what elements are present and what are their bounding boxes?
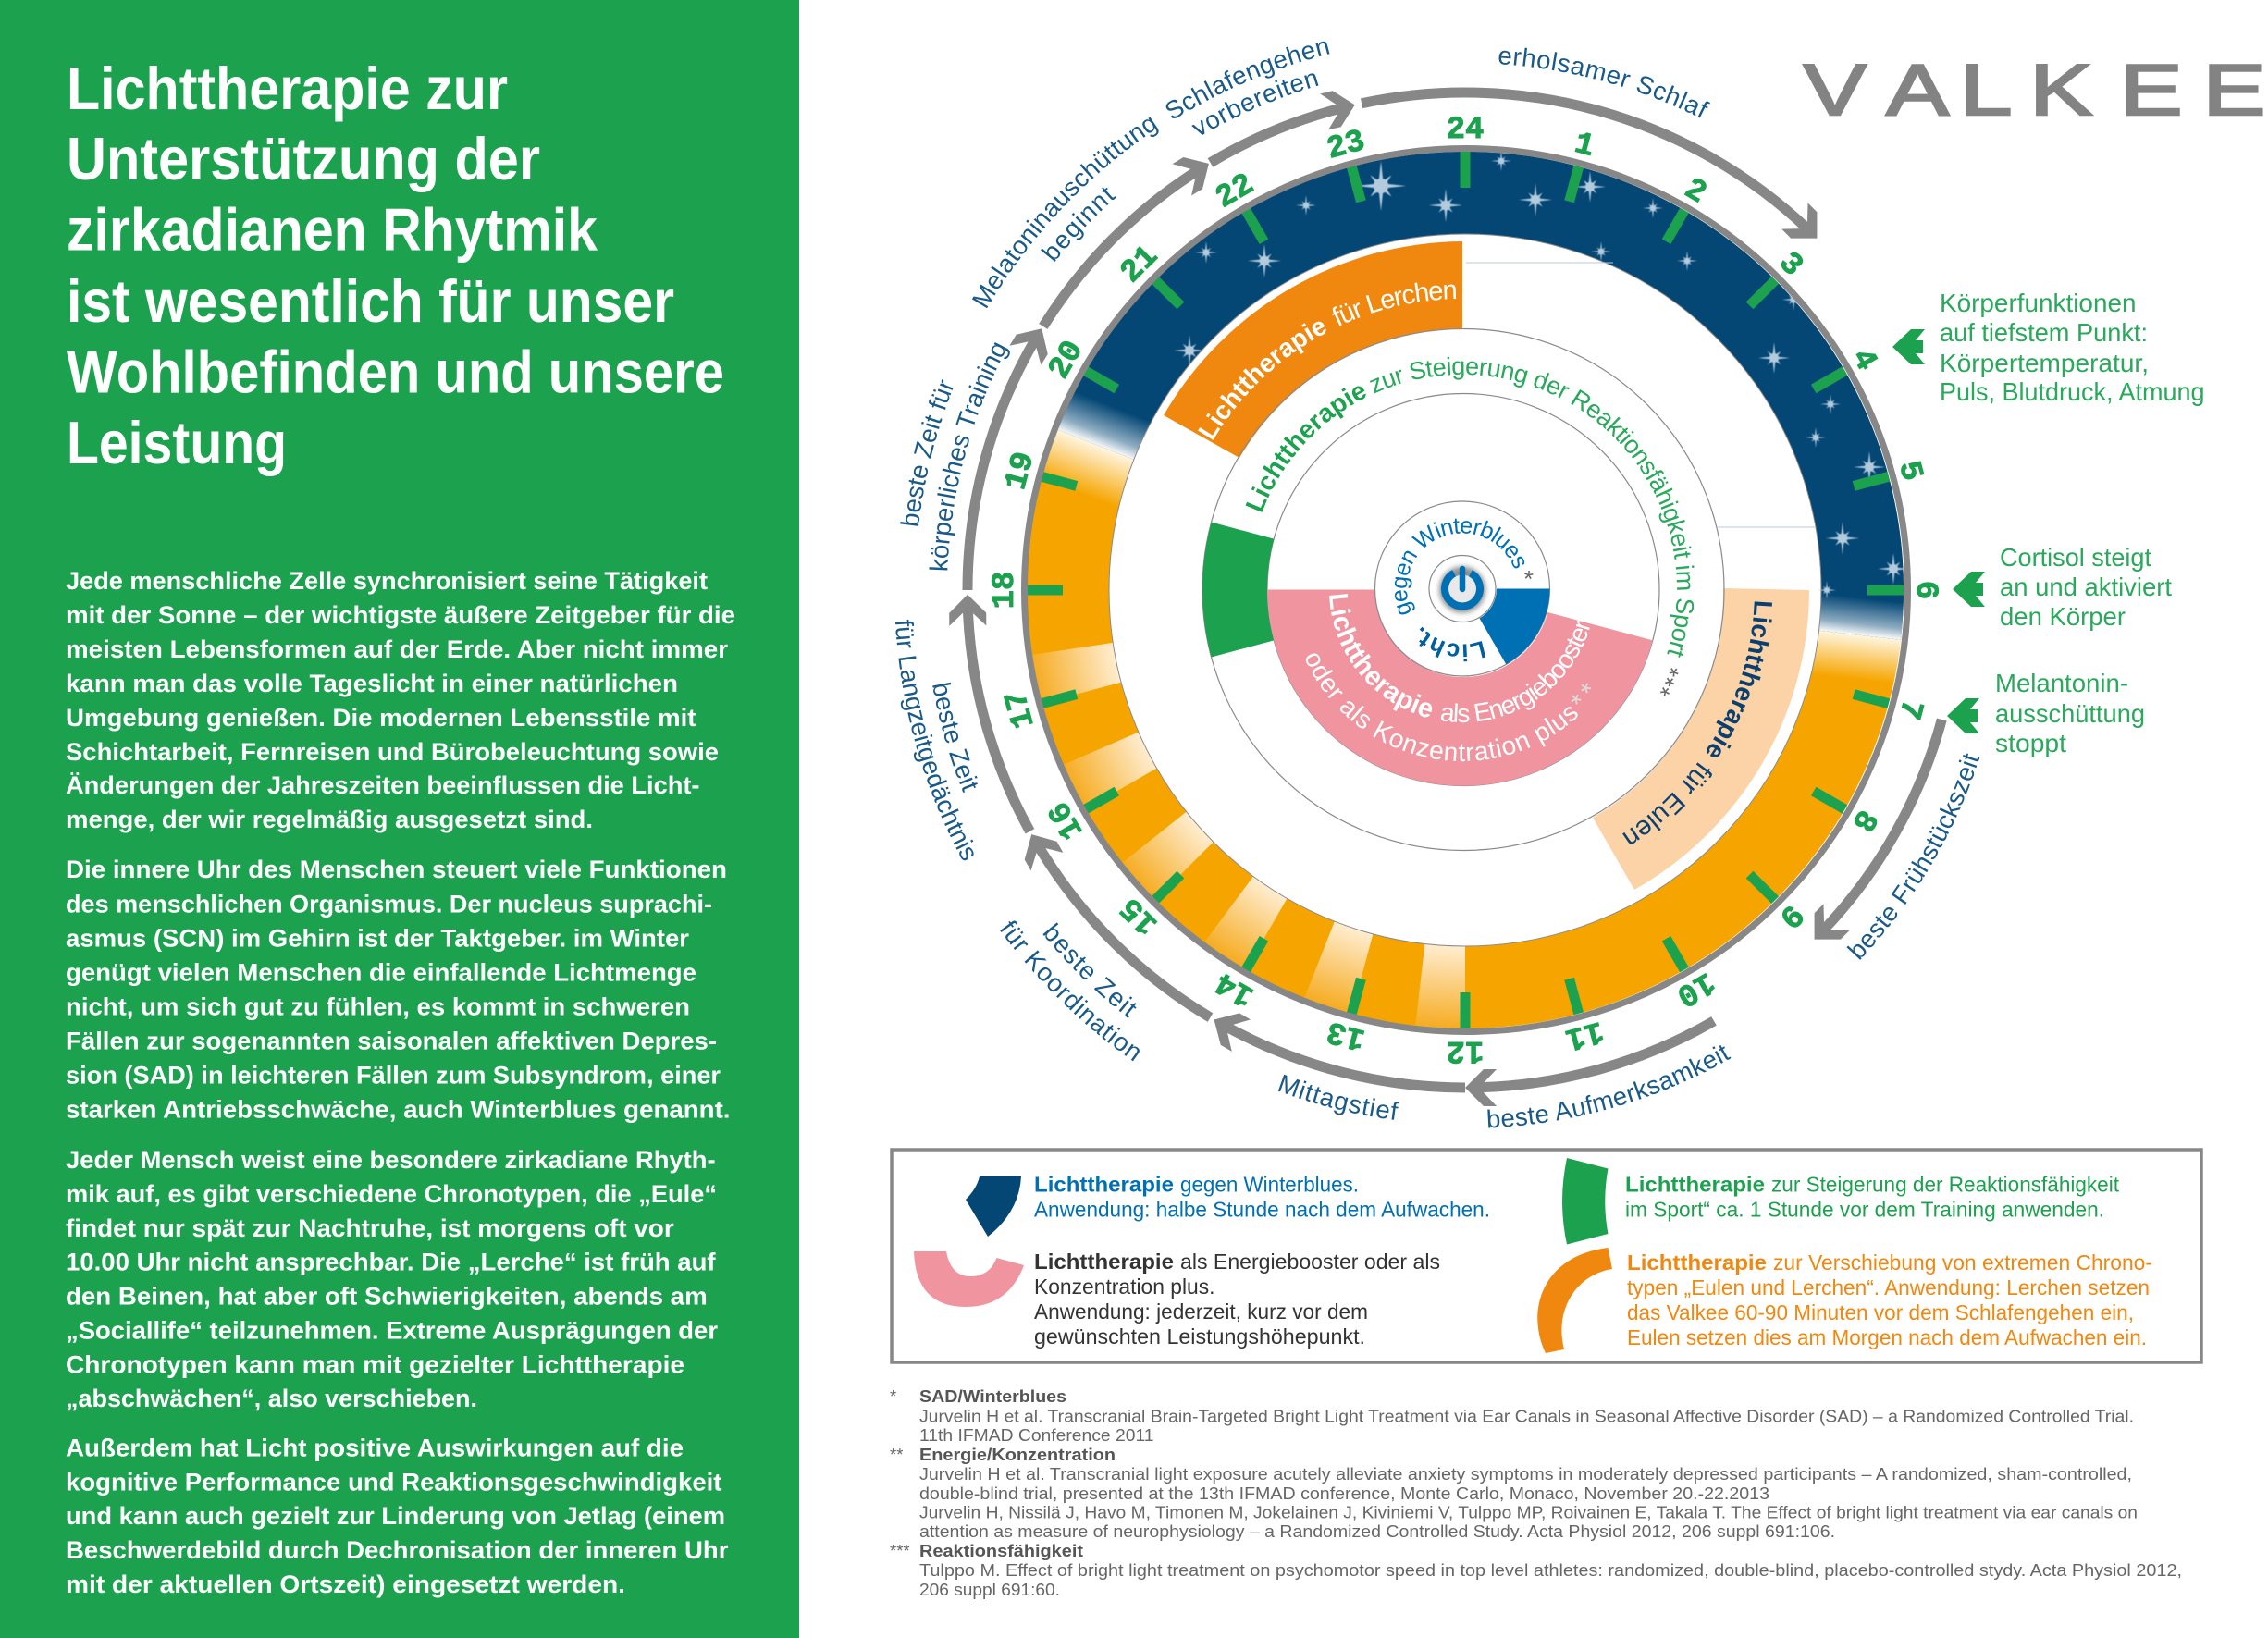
text block: paragraph 2: Fällen zur sogenannten saisonalen affektiven Depres- — [66, 1027, 717, 1054]
navy night band — [1057, 152, 1904, 640]
arrow: Mittagstief — [1204, 1004, 1465, 1088]
curved text: Lichttherapie zur Steigerung der Reaktionsfähigkeit im Sport: Lichttherapie — [1245, 387, 1366, 512]
curved text: Licht gegen Winterblues: gegen Winterblues — [1395, 518, 1524, 614]
text block: paragraph 1: Änderungen der Jahreszeiten beeinflussen die Licht- — [66, 771, 699, 799]
curved text: Licht gegen Winterblues — [1395, 518, 1534, 662]
hour numbers: 14 — [1210, 964, 1261, 1013]
title: ist wesentlich für unser — [67, 267, 674, 335]
footnotes: * — [890, 1386, 896, 1406]
wedge: pink Energiebooster — [1267, 590, 1653, 786]
curved text: Lichttherapie als Energiebooster oder als Konzentration plus: als Energiebooster — [1441, 620, 1590, 723]
curved text: Lichttherapie als Energiebooster oder als Konzentration plus — [1306, 594, 1591, 762]
text block: paragraph 1 — [66, 567, 735, 833]
hour numbers: 22 — [1210, 167, 1261, 216]
label: beste Zeit für Langzeitgedächtnis: für Langzeitgedächtnis — [895, 620, 1021, 860]
text block: paragraph 2: asmus (SCN) im Gehirn ist der Taktgeber. im Winter — [66, 925, 689, 953]
legend text: Chronotypen: zur Verschiebung von extremen Chrono- — [1773, 1250, 2152, 1275]
text block: paragraph 3: mik auf, es gibt verschiedene Chronotypen, die „Eule“ — [66, 1180, 717, 1208]
legend text: Chronotypen: das Valkee 60-90 Minuten vor dem Schlafengehen ein, — [1627, 1300, 2134, 1324]
curved text: Lichttherapie für Eulen: Lichttherapie — [1707, 601, 1772, 757]
callout: Cortisol: den Körper — [2000, 602, 2126, 631]
curved text: Lichttherapie zur Steigerung der Reaktionsfähigkeit im Sport: *** — [1660, 668, 1678, 696]
icon: green wedge — [1562, 1158, 1608, 1245]
callout: Körperfunktionen: Puls, Blutdruck, Atmung — [1940, 377, 2205, 406]
legend text: Winterblues: Anwendung: halbe Stunde nach dem Aufwachen. — [1034, 1197, 1490, 1221]
icon: orange wedge — [1537, 1248, 1612, 1353]
label: beste Aufmerksamkeit: beste Aufmerksamkeit — [1487, 1045, 1732, 1128]
panel: legend — [892, 1150, 2201, 1362]
hour numbers: 13 — [1324, 1012, 1369, 1056]
ring outlines — [1202, 329, 1724, 851]
curved text: Lichttherapie zur Steigerung der Reaktionsfähigkeit im Sport — [1245, 357, 1695, 696]
callout: Melantonin: Melantonin- — [1995, 669, 2128, 697]
hour numbers: 15 — [1115, 890, 1165, 941]
label: beste Frühstückszeit: beste Frühstückszeit — [1846, 753, 1979, 960]
legend text: Chronotypen: typen „Eulen und Lerchen“. Anwendung: Lerchen setzen — [1627, 1275, 2150, 1299]
callout: Cortisol — [2000, 543, 2172, 631]
curved text: Lichttherapie für Eulen — [1622, 601, 1772, 844]
text block: paragraph 3: 10.00 Uhr nicht ansprechbar. Die „Lerche“ ist früh auf — [66, 1249, 716, 1276]
text block: paragraph 2: sion (SAD) in leichteren Fällen zum Subsyndrom, einer — [66, 1062, 721, 1090]
wedge: Lichttherapie für Eulen — [1593, 588, 1809, 890]
panel: green text column — [0, 0, 799, 1638]
callout: Cortisol: Cortisol steigt — [2000, 543, 2151, 572]
hour numbers: 3 — [1771, 246, 1809, 284]
callout: Körperfunktionen — [1940, 289, 2205, 406]
hour numbers: 24 — [1447, 113, 1484, 148]
text block: paragraph 2 — [66, 856, 731, 1123]
icon: green arrow 4h — [1892, 329, 1925, 364]
legend text: Winterblues: Lichttherapie — [1034, 1173, 1174, 1197]
callout: Körperfunktionen: Körperfunktionen — [1940, 289, 2137, 317]
text block: paragraph 1: Schichtarbeit, Fernreisen und Bürobeleuchtung sowie — [66, 738, 719, 766]
text block: paragraph 2: des menschlichen Organismus. Der nucleus suprachi- — [66, 890, 712, 918]
footnotes: Energie/Konzentration — [919, 1445, 1116, 1464]
text block: paragraph 4: und kann auch gezielt zur Linderung von Jetlag (einem — [66, 1502, 725, 1530]
wedge: blue Winterblues — [1480, 588, 1550, 664]
text block: paragraph 4: mit der aktuellen Ortszeit) eingesetzt werden. — [66, 1570, 625, 1598]
clock: day/night ring — [988, 113, 1942, 1067]
label: Schlafengehen vorbereiten: vorbereiten — [1191, 73, 1319, 135]
legend text: Winterblues — [1034, 1173, 1490, 1221]
text block: paragraph 3: den Beinen, hat aber oft Schwierigkeiten, abends am — [66, 1282, 708, 1310]
footnotes: SAD/Winterblues — [919, 1386, 1066, 1406]
footnotes: 11th IFMAD Conference 2011 — [919, 1425, 1154, 1445]
hour numbers: 5 — [1890, 458, 1929, 485]
hour numbers: 16 — [1042, 794, 1091, 845]
callout: Melantonin: stoppt — [1995, 729, 2066, 757]
hour numbers: 20 — [1042, 335, 1091, 386]
footnotes: Jurvelin H et al. Transcranial Brain-Targeted Bright Light Treatment via Ear Canals in Seasonal Affective Disorder (SAD) – a Randomized Controlled Trial. — [919, 1406, 2134, 1426]
hour numbers: 4 — [1843, 343, 1883, 377]
arrow: erholsamer Schlaf — [1362, 92, 1830, 252]
wedge: Lichttherapie für Lerchen — [1164, 241, 1462, 458]
text block: paragraph 1: Jede menschliche Zelle synchronisiert seine Tätigkeit — [66, 567, 708, 595]
text block: paragraph 1: kann man das volle Tageslicht in einer natürlichen — [66, 670, 678, 697]
footnotes: ** — [890, 1445, 903, 1464]
label: Schlafengehen vorbereiten: Schlafengehen — [1165, 41, 1330, 144]
curved text: Lichttherapie für Lerchen: für Lerchen — [1332, 283, 1456, 326]
footnotes — [890, 1386, 2182, 1599]
callout: Cortisol: an und aktiviert — [2000, 573, 2172, 601]
label: beste Zeit für körperliches Training: beste Zeit für — [900, 379, 953, 526]
legend text: Reaktionsfähigkeit: im Sport“ ca. 1 Stunde vor dem Training anwenden. — [1625, 1197, 2104, 1221]
label: Melatoninauschüttung beginnt: Melatoninauschüttung — [972, 117, 1159, 309]
footnotes: Jurvelin H et al. Transcranial light exposure acutely alleviate anxiety symptoms in moderately depressed participants – A randomized, sham-controlled, — [919, 1464, 2132, 1484]
text block: paragraph 4 — [66, 1434, 729, 1598]
hour ticks — [1027, 152, 1904, 1028]
hour numbers: 23 — [1324, 124, 1369, 168]
curved text: Lichttherapie für Lerchen: Lichttherapie — [1198, 322, 1326, 440]
arrow: Langzeitgedächtnis — [949, 595, 1030, 831]
icon: pink wedge — [914, 1251, 1024, 1307]
text block: paragraph 2: starken Antriebsschwäche, auch Winterblues genannt. — [66, 1095, 731, 1123]
text block: paragraph 1: Umgebung genießen. Die modernen Lebensstile mit — [66, 704, 696, 732]
hour numbers: 12 — [1447, 1032, 1484, 1067]
text block: paragraph 4: Beschwerdebild durch Dechronisation der inneren Uhr — [66, 1536, 729, 1564]
text block: paragraph 3: Chronotypen kann man mit gezielter Lichttherapie — [66, 1350, 684, 1378]
curved text: Lichttherapie als Energiebooster oder als Konzentration plus: oder als Konzentration plus — [1306, 653, 1578, 762]
legend text: Energiebooster: Konzentration plus. — [1034, 1275, 1215, 1299]
footnotes: 206 suppl 691:60. — [919, 1580, 1060, 1599]
icon: power button — [1429, 555, 1496, 622]
title: zirkadianen Rhytmik — [67, 196, 598, 263]
text block: paragraph 4: Außerdem hat Licht positive Auswirkungen auf die — [66, 1434, 684, 1461]
title — [67, 55, 724, 476]
arrow: Schlafengehen vorbereiten — [1210, 87, 1359, 163]
hour numbers: 21 — [1115, 240, 1165, 290]
hour numbers — [988, 113, 1942, 1067]
curved text: Lichttherapie für Lerchen — [1198, 283, 1456, 440]
hour numbers: 7 — [1890, 696, 1929, 722]
legend text: Reaktionsfähigkeit: zur Steigerung der Reaktionsfähigkeit — [1771, 1173, 2120, 1197]
curved text: Lichttherapie zur Steigerung der Reaktionsfähigkeit im Sport: zur Steigerung der Reaktionsfähigkeit im Sport — [1369, 357, 1695, 658]
centre circle — [1374, 501, 1550, 676]
hour numbers: 6 — [1907, 581, 1942, 599]
text block: paragraph 1: mit der Sonne – der wichtigste äußere Zeitgeber für die — [66, 601, 735, 629]
hour numbers: 9 — [1771, 896, 1809, 934]
legend text: Energiebooster: gewünschten Leistungshöhepunkt. — [1034, 1324, 1365, 1349]
arrow: Frühstückszeit — [1801, 720, 1941, 953]
icon: green arrow 6h — [1953, 572, 1985, 607]
footnotes: double-blind trial, presented at the 13th IFMAD conference, Monte Carlo, Monaco, November 20.-22.2013 — [919, 1484, 1769, 1503]
curved text: Licht gegen Winterblues: * — [1524, 571, 1534, 579]
hour numbers: 18 — [988, 572, 1023, 609]
title: Lichttherapie zur — [67, 55, 508, 122]
light stripes in afternoon band — [1029, 634, 1465, 1028]
label: beste Zeit für Langzeitgedächtnis: beste Zeit — [932, 683, 978, 793]
hour numbers: 10 — [1670, 964, 1720, 1013]
curved text: Licht gegen Winterblues: Licht. — [1419, 627, 1485, 662]
arrow: körperliches Training — [968, 319, 1057, 590]
logo: VALKEE: VALKEE — [1804, 50, 2265, 130]
label: beste Zeit für Langzeitgedächtnis — [895, 620, 1021, 860]
legend text: Chronotypen — [1627, 1250, 2152, 1349]
text block: paragraph 3 — [66, 1146, 718, 1412]
hour numbers: 8 — [1843, 803, 1883, 837]
label: Melatoninauschüttung beginnt: beginnt — [1041, 187, 1116, 262]
label: Mittagstief: Mittagstief — [1278, 1075, 1399, 1120]
legend text: Reaktionsfähigkeit — [1625, 1173, 2120, 1221]
legend text: Chronotypen: Lichttherapie — [1627, 1250, 1767, 1275]
curved text: Lichttherapie als Energiebooster oder als Konzentration plus: Lichttherapie — [1329, 594, 1432, 718]
text block: paragraph 1: meisten Lebensformen auf der Erde. Aber nicht immer — [66, 635, 728, 663]
text block: paragraph 3: „abschwächen“, also verschieben. — [66, 1385, 477, 1412]
callout: Körperfunktionen: Körpertemperatur, — [1940, 349, 2149, 377]
label: erholsamer Schlaf: erholsamer Schlaf — [1498, 48, 1710, 118]
hour numbers: 2 — [1678, 172, 1712, 212]
title: Wohlbefinden und unsere — [67, 339, 724, 405]
footnotes: Reaktionsfähigkeit — [919, 1541, 1083, 1560]
label: beste Zeit für körperliches Training: körperliches Training — [929, 342, 1010, 570]
text block: paragraph 3: „Sociallife“ teilzunehmen. Extreme Ausprägungen der — [66, 1317, 718, 1345]
callout: Körperfunktionen: auf tiefstem Punkt: — [1940, 318, 2148, 347]
legend text: Reaktionsfähigkeit: Lichttherapie — [1625, 1173, 1765, 1197]
callout: Melantonin: ausschüttung — [1995, 699, 2145, 728]
text block: paragraph 3: Jeder Mensch weist eine besondere zirkadiane Rhyth- — [66, 1146, 716, 1174]
text block: paragraph 4: kognitive Performance und Reaktionsgeschwindigkeit — [66, 1469, 722, 1496]
title: Unterstützung der — [67, 125, 540, 192]
legend text: Chronotypen: Eulen setzen dies am Morgen nach dem Aufwachen ein. — [1627, 1325, 2147, 1349]
hour numbers: 17 — [999, 686, 1043, 732]
legend text: Winterblues: gegen Winterblues. — [1180, 1173, 1359, 1197]
title: Leistung — [67, 409, 287, 476]
footnotes: attention as measure of neurophysiology – a Randomized Controlled Study. Acta Physiol 2012, 206 suppl 691:106. — [919, 1521, 1835, 1541]
icon: navy wedge — [966, 1176, 1021, 1237]
legend text: Energiebooster: Anwendung: jederzeit, kurz vor dem — [1034, 1299, 1368, 1324]
legend text: Energiebooster: als Energiebooster oder als — [1180, 1250, 1440, 1274]
icon: green arrow 7h — [1947, 698, 1979, 733]
thin guide lines — [1466, 263, 1816, 527]
label: beste Zeit für Koordination: beste Zeit — [1042, 922, 1136, 1018]
footnotes: Tulppo M. Effect of bright light treatment on psychomotor speed in top level athletes: randomized, double-blind, placebo-controlled stydy. Acta Physiol 2012, — [919, 1560, 2182, 1580]
footnotes: Jurvelin H, Nissilä J, Havo M, Timonen M, Jokelainen J, Kiviniemi V, Tulppo MP, Roivainen E, Takala T. The Effect of bright light treatment via ear canals on — [919, 1502, 2138, 1522]
curved text: Lichttherapie für Eulen: für Eulen — [1622, 762, 1712, 844]
legend text: Energiebooster: Lichttherapie — [1034, 1250, 1174, 1274]
hour numbers: 1 — [1571, 127, 1597, 166]
stars — [1174, 151, 1909, 599]
legend text: Energiebooster — [1034, 1250, 1440, 1349]
text block: paragraph 2: genügt vielen Menschen die einfallende Lichtmenge — [66, 958, 696, 986]
wedge: green Reaktionsfähigkeit — [1202, 522, 1274, 657]
arrow: Aufmerksamkeit — [1465, 1021, 1714, 1106]
arrow: Melatoninausschüttung — [1043, 148, 1218, 326]
hour numbers: 11 — [1561, 1012, 1607, 1056]
text block: paragraph 2: Die innere Uhr des Menschen steuert viele Funktionen — [66, 856, 727, 883]
hour numbers: 19 — [999, 449, 1043, 494]
text block: paragraph 3: findet nur spät zur Nachtruhe, ist morgens oft vor — [66, 1214, 674, 1242]
text block: paragraph 2: nicht, um sich gut zu fühlen, es kommt in schweren — [66, 993, 690, 1021]
orange day band — [1067, 192, 1863, 988]
footnotes: *** — [890, 1541, 910, 1560]
text block: paragraph 1: menge, der wir regelmäßig ausgesetzt sind. — [66, 806, 593, 833]
curved text: Lichttherapie als Energiebooster oder als Konzentration plus: ** — [1571, 683, 1591, 705]
arrow: Koordination — [1016, 825, 1210, 1017]
label: beste Zeit für Koordination: für Koordination — [1000, 921, 1140, 1062]
callout: Melantonin — [1995, 669, 2145, 757]
